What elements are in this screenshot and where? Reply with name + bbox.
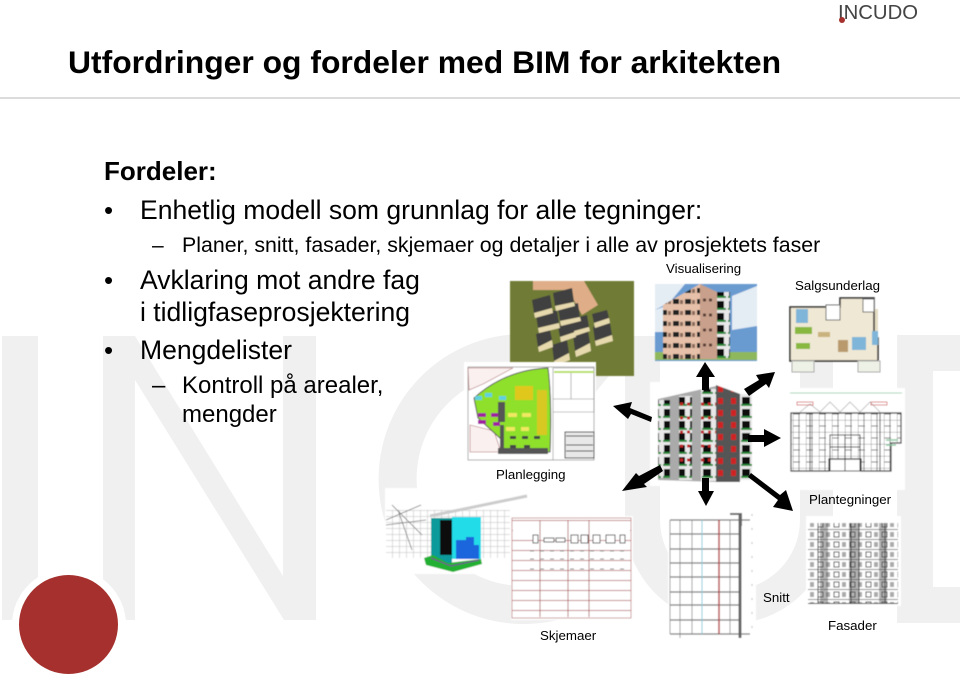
arrow: down to section [698,478,714,506]
text block: advantages list: • [104,335,113,365]
arrows [613,362,793,511]
text block: advantages list: Kontroll på arealer, [182,372,383,399]
text block: advantages list: Avklaring mot andre fag [140,265,420,295]
logo: INCUDO: INCUDO [838,2,918,24]
image: site plan [464,362,596,462]
label: section: Snitt [763,590,790,605]
header rule [0,97,960,99]
text block: advantages list: i tidligfaseprosjektering [140,297,410,327]
arrow: to site plan [613,402,652,422]
label: visualisation: Visualisering [666,261,741,276]
text block: advantages list: mengder [182,401,277,428]
text block: advantages list: Fordeler: [104,156,217,186]
label: schedules: Skjemaer [540,628,596,643]
image: sales floor plan [790,298,880,372]
image: facade drawing [806,516,901,606]
text block: advantages list: • [104,195,113,225]
arrow: to wireframe [622,465,663,491]
red circle [12,568,126,675]
arrow: up to visualisation [696,362,715,390]
image: 3D wireframe model [385,488,527,574]
title: Utfordringer og fordeler med BIM for arkitekten [68,44,781,80]
arrow: to sales plan [744,372,775,396]
text block: advantages list: – [152,234,164,257]
arrow: to plantegninger [748,473,793,511]
label: planning: Planlegging [496,467,566,482]
text block: advantages list: Mengdelister [140,335,292,365]
text block: advantages list: Enhetlig modell som grunnlag for alle tegninger: [140,195,702,225]
image: schedules table [511,516,633,620]
label: floor plans: Plantegninger [809,492,891,507]
image: central BIM building [650,382,758,486]
text block: advantages list: • [104,265,113,295]
label: facades: Fasader [828,618,877,633]
arrow: to floor plan [748,429,781,447]
image: visualisation photo [655,284,757,361]
text block: advantages list: Planer, snitt, fasader, skjemaer og detaljer i alle av prosjektets faser [182,232,820,256]
label: sales: Salgsunderlag [795,278,880,293]
text block: advantages list [104,156,820,428]
image: floor plan drawing [780,388,905,490]
image: 3D site model [510,281,634,376]
text block: advantages list: – [152,372,165,399]
image: section drawing [668,510,756,643]
